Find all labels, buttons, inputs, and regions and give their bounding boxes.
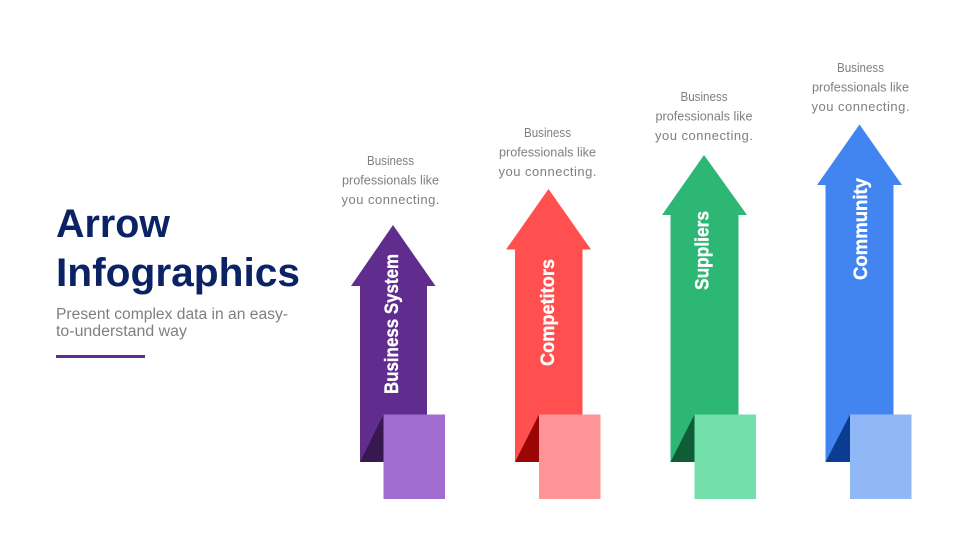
- fold shadow: [360, 414, 384, 462]
- arrow: community: [817, 124, 912, 499]
- caption: community: you connecting.: [812, 99, 910, 114]
- caption: competitors: you connecting.: [498, 164, 596, 179]
- caption: suppliers: Business: [680, 90, 728, 104]
- caption: suppliers: you connecting.: [655, 128, 753, 143]
- subtitle: [56, 306, 288, 340]
- title: [56, 202, 300, 295]
- caption: business system: professionals like: [342, 172, 439, 188]
- fold square: [539, 414, 600, 499]
- title underline: [56, 355, 145, 358]
- arrow label: Business System: [382, 254, 403, 394]
- fold shadow: [826, 414, 850, 462]
- caption: competitors: Business: [524, 126, 571, 140]
- subtitle: to-understand way: [56, 323, 187, 340]
- arrow label: Competitors: [538, 259, 559, 366]
- caption: community: Business: [837, 61, 884, 75]
- arrow label: Suppliers: [692, 211, 714, 290]
- arrow: competitors: [506, 189, 600, 499]
- fold square: [694, 414, 756, 499]
- caption: suppliers: [655, 90, 753, 143]
- title: Arrow: [56, 202, 171, 246]
- caption: community: professionals like: [812, 80, 909, 94]
- caption: competitors: professionals like: [499, 144, 596, 160]
- caption: community: [812, 61, 910, 114]
- subtitle: Present complex data in an easy-: [56, 306, 288, 323]
- fold square: [384, 414, 445, 499]
- fold shadow: [515, 414, 539, 462]
- fold square: [850, 414, 912, 499]
- caption: suppliers: professionals like: [656, 108, 752, 124]
- caption: business system: you connecting.: [342, 192, 440, 207]
- title: Infographics: [56, 251, 300, 295]
- caption: business system: Business: [367, 154, 414, 168]
- caption: competitors: [498, 126, 596, 179]
- arrow: business system: [351, 225, 445, 499]
- arrow: suppliers: [662, 155, 756, 499]
- caption: business system: [342, 154, 440, 207]
- fold shadow: [670, 414, 694, 462]
- arrow label: Community: [851, 178, 872, 280]
